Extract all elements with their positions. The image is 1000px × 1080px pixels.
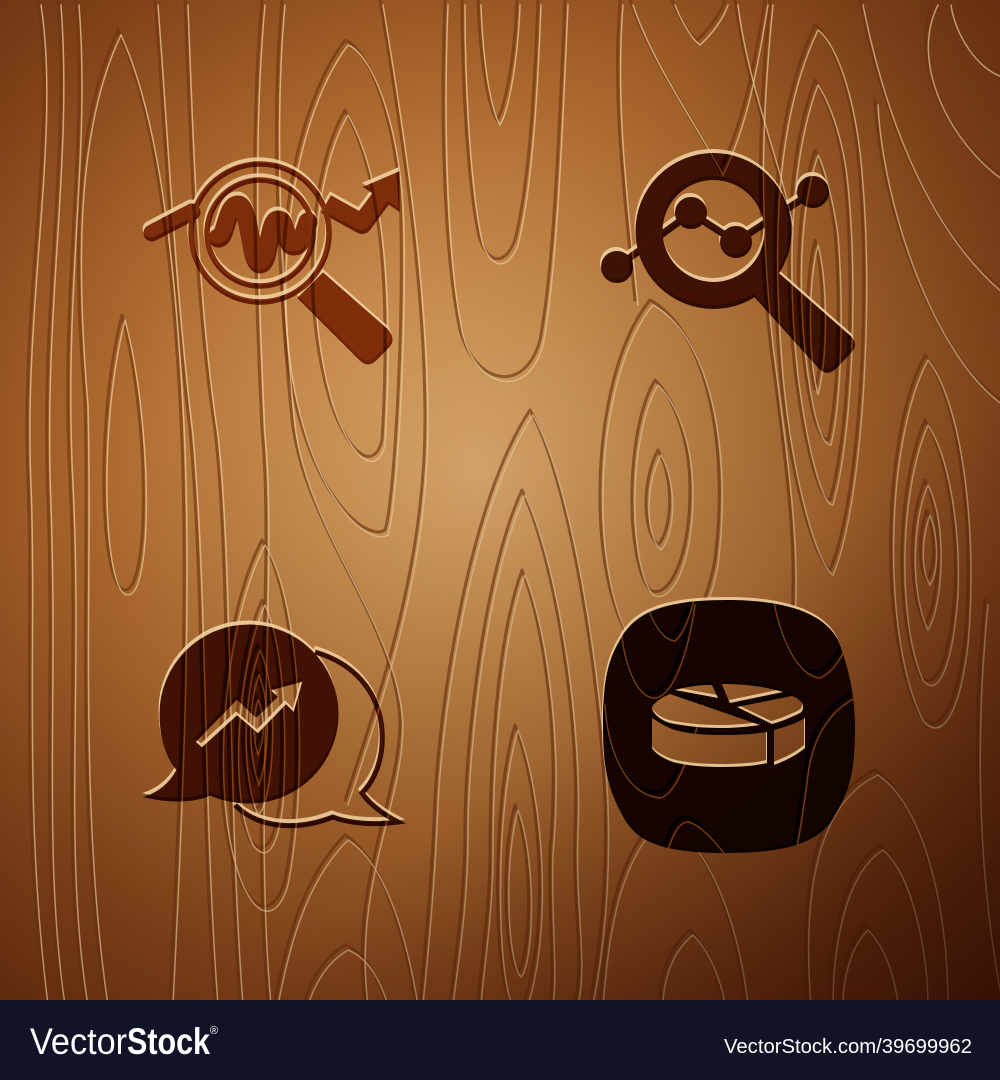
icon: magnifier with dotted line chart xyxy=(600,149,855,373)
icon: speech bubbles with trend arrow xyxy=(142,620,406,828)
icon: rounded square with pie chart xyxy=(602,597,855,853)
footer image id: VectorStock.com/39699962 xyxy=(724,1036,972,1058)
icon: magnifier with wave and arrow xyxy=(142,157,400,364)
footer logo: ® xyxy=(210,1025,218,1037)
footer bar xyxy=(0,1000,1000,1080)
footer logo: VectorStock xyxy=(30,1021,228,1062)
